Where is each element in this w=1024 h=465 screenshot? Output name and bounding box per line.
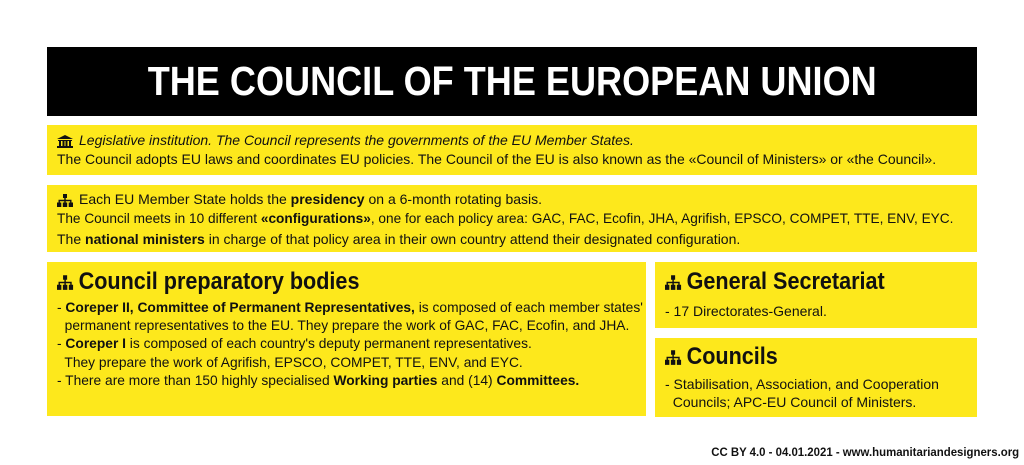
text: bullet list: permanent representatives to the EU. They prepare the work of GAC, FAC, Ecofin, and JHA.: [65, 317, 629, 333]
text: institution description: Legislative institution. The Council represents the governments of the EU Member States.: [79, 132, 634, 148]
panel: council preparatory bodies: [47, 262, 646, 416]
footer credit: CC BY 4.0 - 04.01.2021 - www.humanitariandesigners.org: [711, 445, 1019, 459]
title: THE COUNCIL OF THE EUROPEAN UNION: [148, 58, 876, 104]
panel: presidency and configurations: [47, 185, 977, 252]
text: councils list: Councils; APC-EU Council of Ministers.: [673, 394, 916, 410]
heading: general secretariat: General Secretariat: [687, 268, 885, 295]
text: council adopts: The Council adopts EU laws and coordinates EU policies. The Council of the EU is also known as the «Council of Ministers» or «the Council».: [57, 151, 936, 167]
heading: councils: Councils: [687, 343, 778, 370]
panel: councils: [655, 338, 977, 417]
text: councils list: [665, 376, 939, 410]
title banner: [47, 47, 977, 116]
text: bullet list: - There are more than 150 highly specialised Working parties and (14) Committees.: [57, 372, 579, 388]
text: bullet list: - Coreper II, Committee of Permanent Representatives, is composed of each member states': [57, 299, 643, 315]
heading: preparatory bodies: Council preparatory bodies: [79, 268, 359, 295]
text: bullet list: [57, 299, 643, 388]
text: directorates: - 17 Directorates-General.: [665, 303, 827, 319]
text: configurations: The Council meets in 10 different «configurations», one for each policy area: GAC, FAC, Ecofin, JHA, Agrifish, EPSCO, COMPET, TTE, ENV, EYC.: [57, 210, 953, 226]
text: presidency: Each EU Member State holds the presidency on a 6-month rotating basis.: [79, 191, 542, 207]
text: national ministers: The national ministers in charge of that policy area in their own country attend their designated configuration.: [57, 231, 740, 247]
text: councils list: - Stabilisation, Association, and Cooperation: [665, 376, 939, 392]
panel: general secretariat: [655, 262, 977, 328]
text: bullet list: - Coreper I is composed of each country's deputy permanent representatives.: [57, 335, 532, 351]
panel: legislative institution: [47, 125, 977, 175]
text: bullet list: They prepare the work of Agrifish, EPSCO, COMPET, TTE, ENV, and EYC.: [64, 354, 523, 370]
